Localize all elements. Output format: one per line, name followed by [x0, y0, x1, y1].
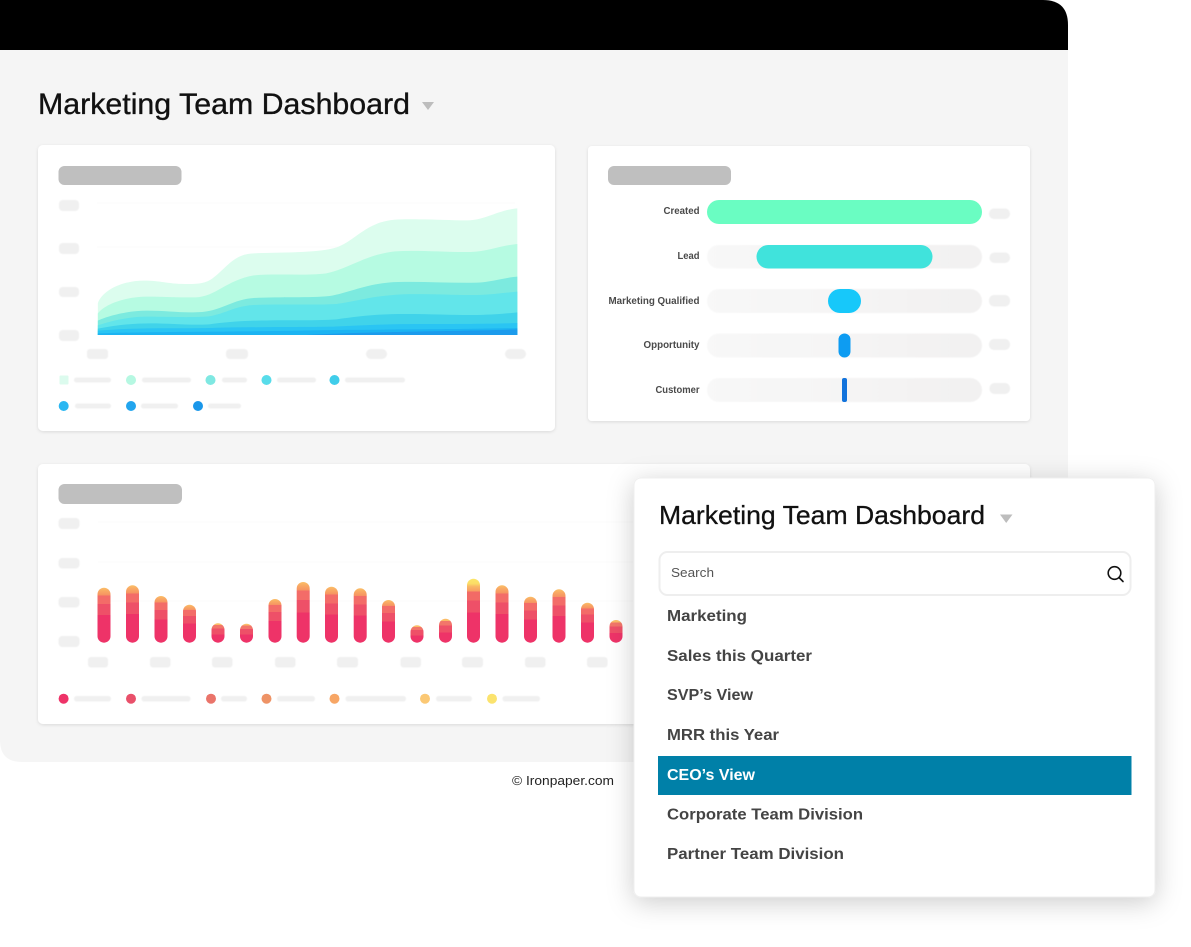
dashboard list: CEO’s View	[667, 767, 756, 784]
dashboard list: Partner Team Division	[667, 846, 844, 863]
funnel labels: Opportunity	[644, 340, 700, 351]
funnel labels: Marketing Qualified	[608, 296, 700, 307]
icon: title dropdown arrow	[422, 102, 434, 110]
bar chart legend	[59, 694, 540, 704]
funnel labels	[608, 206, 700, 396]
popup title: Marketing Team Dashboard	[659, 500, 985, 530]
title: Marketing Team Dashboard	[38, 88, 410, 121]
x axis placeholders	[87, 349, 526, 359]
dashboard frame	[0, 0, 1068, 762]
y axis placeholders	[59, 200, 79, 341]
dashboard list: Marketing	[667, 608, 747, 625]
bar chart heading placeholder	[58, 484, 182, 504]
funnel bar: customer	[842, 378, 847, 402]
search placeholder: Search	[671, 565, 714, 580]
panel: area chart	[38, 145, 555, 431]
dashboard list: MRR this Year	[667, 727, 779, 744]
funnel bar: created	[707, 200, 982, 224]
dashboard list	[667, 608, 863, 863]
funnel labels: Created	[664, 206, 700, 217]
panel: dropdown popup	[634, 478, 1155, 897]
dashboard list: Corporate Team Division	[667, 806, 863, 824]
bar chart y axis placeholders	[58, 518, 80, 647]
legend	[59, 375, 405, 411]
browser top bar	[0, 0, 1068, 50]
stacked pill bars	[98, 579, 622, 643]
funnel bar: opportunity	[838, 334, 850, 358]
funnel labels: Lead	[678, 251, 700, 262]
bar chart x axis placeholders	[88, 657, 608, 668]
search box	[660, 552, 1130, 595]
credit: © Ironpaper.com	[512, 773, 614, 788]
funnel bar: lead	[756, 245, 932, 268]
funnel heading placeholder	[608, 166, 731, 185]
funnel tracks	[707, 245, 982, 402]
icon: magnifier	[1108, 567, 1123, 582]
panel: funnel chart	[588, 146, 1030, 421]
dashboard list: SVP’s View	[667, 687, 754, 704]
selected row highlight	[658, 756, 1132, 795]
icon: popup dropdown arrow	[1000, 514, 1012, 523]
panel heading placeholder	[58, 166, 182, 185]
funnel labels: Customer	[656, 385, 700, 396]
stacked area chart	[98, 208, 517, 335]
funnel bar: marketing qualified	[828, 289, 861, 313]
panel: bar chart	[38, 464, 1030, 724]
dashboard list: Sales this Quarter	[667, 648, 812, 665]
funnel value placeholders	[989, 208, 1010, 394]
